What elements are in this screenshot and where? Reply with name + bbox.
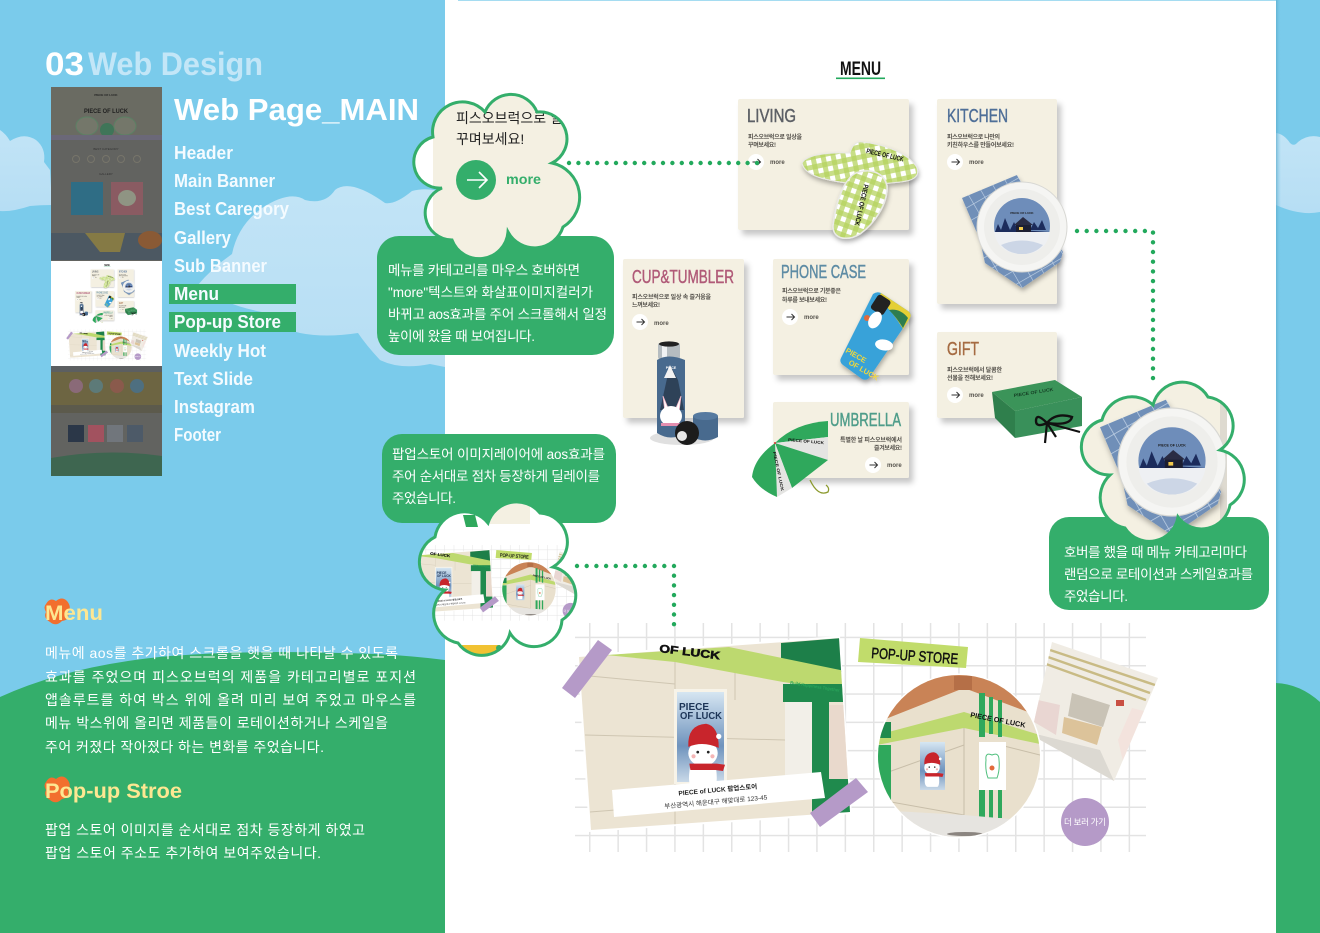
thumbnail of web page: PIECE OF LUCK — [84, 109, 129, 115]
text block: Pop-up description: 팝업 스토어 이미지를 순서대로 점차 등장하게 하였고 — [45, 822, 365, 838]
card: phone case: 하루를 보내보세요! — [782, 296, 827, 304]
callout: hover rotation: 랜덤으로 로테이션과 스케일효과를 — [1064, 567, 1253, 582]
menu heading: MENU — [840, 59, 881, 80]
thumbnail of web page: GALLERY — [99, 172, 113, 176]
text block: Menu description: 메뉴 박스위에 올리면 제품들이 로테이션하거나 스케일을 — [45, 715, 388, 731]
card: umbrella: UMBRELLA — [830, 410, 901, 430]
navigation list: Best Caregory — [174, 199, 289, 219]
photo: storefront — [570, 630, 860, 840]
product: phone case: PIECE — [844, 346, 868, 365]
white page panel — [445, 0, 1276, 933]
product: umbrella: PIECE OF LUCK — [788, 437, 824, 445]
dotted connector: menu hover — [569, 161, 760, 165]
navigation list: Instagram — [174, 397, 255, 417]
navigation list: Menu — [174, 284, 219, 304]
photo: shop interior — [1025, 640, 1165, 785]
product: gift box: PIECE OF LUCK — [1013, 387, 1055, 398]
card: cup and tumbler: CUP&TUMBLER — [632, 267, 734, 287]
green hill: left — [0, 652, 445, 933]
card: living: 피스오브럭으로 일상을 — [748, 133, 802, 141]
more button — [1061, 798, 1109, 846]
product: slippers — [802, 142, 918, 238]
callout: more hover: "more"텍스트와 화살표이미지컬러가 — [388, 285, 593, 300]
product: gift box — [992, 380, 1082, 443]
callout: hover rotation — [1049, 517, 1269, 610]
highlight: menu — [169, 284, 296, 304]
photo: round storefront — [875, 670, 1045, 840]
page title: Web Page_MAIN — [174, 92, 419, 127]
arrow button — [456, 160, 496, 200]
card: gift: 피스오브럭에서 달콤한 — [947, 366, 1002, 374]
card: kitchen: more — [969, 160, 984, 166]
product: plate and napkin: PIECE OF LUCK — [1010, 211, 1034, 215]
photo: storefront: OF LUCK — [659, 643, 721, 662]
product: phone case — [840, 292, 911, 383]
callout: pop-up delay: 팝업스토어 이미지레이어에 aos효과를 — [392, 447, 605, 462]
heading: Menu: Menu — [45, 602, 103, 625]
callout: more hover: 메뉴를 카테고리를 마우스 호버하면 — [388, 263, 580, 278]
card: kitchen — [937, 99, 1057, 304]
cloud: left small — [0, 130, 52, 211]
product: slippers: PIECE OF LUCK — [866, 148, 904, 163]
card: gift: more — [969, 393, 984, 399]
card: umbrella: 특별한 날 피스오브럭에서 — [840, 436, 902, 444]
card: living — [738, 99, 909, 230]
address card: PIECE of LUCK 팝업스토어 — [678, 782, 758, 797]
pop-up store label — [858, 638, 968, 668]
menu section — [623, 59, 1082, 497]
card: living: more — [770, 160, 785, 166]
navigation list: Sub Banner — [174, 256, 267, 276]
clover magnifier: more button: 꾸며보세요! — [456, 131, 524, 147]
card: phone case: 피스오브럭으로 기분좋은 — [782, 287, 841, 295]
text block: Menu description: 효과를 주었으며 피스오브럭의 제품을 카테고리별로 포지션 — [45, 669, 416, 685]
callout: more hover: 바뀌고 aos효과를 주어 스크롤해서 일정 — [388, 307, 607, 322]
card: umbrella — [773, 402, 909, 478]
text block: Pop-up description: 팝업 스토어 주소도 추가하여 보여주었습니다. — [45, 845, 321, 861]
product: umbrella — [752, 421, 829, 497]
callout: more hover: 높이에 왔을 때 보여집니다. — [388, 329, 535, 344]
thumbnail of web page: BEST CATEGORY — [93, 147, 119, 151]
navigation list: Footer — [174, 425, 221, 445]
callout: hover rotation: 주었습니다. — [1064, 589, 1128, 604]
navigation list: Weekly Hot — [174, 341, 266, 361]
photo: storefront: Build Happiness Together — [790, 680, 840, 693]
card: cup and tumbler: more — [654, 321, 669, 327]
product: umbrella: PIECE OF LUCK — [772, 451, 785, 491]
text block: Pop-up description — [45, 822, 365, 861]
navigation list — [169, 143, 296, 445]
callout: hover rotation: 호버를 했을 때 메뉴 카테고리마다 — [1064, 545, 1248, 560]
pop-up store section — [562, 623, 1165, 852]
photo: storefront: PIECE — [679, 702, 709, 713]
text block: Menu description: 메뉴에 aos를 추가하여 스크롤을 햇을 때 나타날 수 있도록 — [45, 645, 398, 661]
card: gift: 선물을 전해보세요! — [947, 374, 993, 382]
cloud: right — [1276, 133, 1320, 213]
navigation list: Pop-up Store — [174, 312, 281, 332]
product: slippers: PIECE OF LUCK — [853, 184, 869, 226]
section title: 03 — [45, 46, 84, 82]
callout: more hover — [377, 236, 614, 355]
section title: Web Design — [88, 46, 263, 82]
clover magnifier: more button — [412, 92, 582, 258]
card: phone case: PHONE CASE — [781, 262, 866, 282]
navigation list: Text Slide — [174, 369, 253, 389]
dotted connector: pop-up — [577, 566, 674, 627]
callout: pop-up delay: 주어 순서대로 점차 등장하게 딜레이를 — [392, 469, 600, 484]
clover magnifier: pop-up — [418, 503, 578, 657]
card: cup and tumbler: 피스오브럭으로 일상 속 즐거움을 — [632, 293, 711, 301]
product: tumbler: PIECE — [666, 366, 677, 370]
product: plate and napkin — [962, 175, 1067, 288]
callout: pop-up delay — [382, 434, 616, 523]
heading: Pop-up Stroe: Pop-up Stroe — [45, 780, 182, 803]
navigation list: Gallery — [174, 228, 231, 248]
thumbnail of web page: PIECE OF LUCK — [94, 93, 118, 97]
green hill: right — [1276, 683, 1320, 933]
pop-up store label: POP-UP STORE — [871, 645, 959, 668]
card: kitchen: 피스오브럭으로 나만의 — [947, 133, 1000, 141]
dotted connector: kitchen hover — [1077, 231, 1153, 386]
text block: Menu description: 주어 커졌다 작아졌다 하는 변화를 주었습니다. — [45, 739, 324, 755]
tape: top left — [562, 640, 612, 698]
card: living: LIVING — [747, 106, 796, 126]
card: gift — [937, 332, 1057, 418]
photo: round storefront: PIECE OF LUCK — [970, 710, 1027, 730]
more button: 더 보러 가기 — [1064, 817, 1106, 827]
navigation list: Header — [174, 143, 233, 163]
card: gift: GIFT — [947, 339, 979, 359]
card: kitchen: 키친하우스를 만들어보세요! — [947, 141, 1014, 149]
clover magnifier: more button: 피스오브럭으로 일상을 — [456, 110, 589, 126]
photo: storefront: OF LUCK — [680, 711, 723, 722]
address card — [612, 772, 825, 817]
callout: pop-up delay: 주었습니다. — [392, 491, 456, 506]
card: umbrella: more — [887, 463, 902, 469]
card: cup and tumbler: 느껴보세요! — [632, 301, 660, 309]
card: phone case — [773, 259, 909, 375]
navigation list: Main Banner — [174, 171, 275, 191]
product: tumbler — [650, 341, 718, 445]
grid background — [575, 623, 1146, 852]
product: phone case: OF LUCK — [847, 358, 881, 383]
card: living: 꾸며보세요! — [748, 141, 776, 149]
card: cup and tumbler — [623, 259, 744, 418]
card: kitchen: KITCHEN — [947, 106, 1008, 126]
clover magnifier: plate — [1080, 380, 1246, 540]
thumbnail of web page — [51, 87, 162, 476]
card: phone case: more — [804, 315, 819, 321]
text block: Menu description — [45, 645, 416, 755]
card: umbrella: 즐겨보세요! — [874, 444, 902, 452]
cloud: big centre — [197, 186, 450, 368]
text block: Menu description: 앱솔루트를 하여 박스 위에 올려 미리 보여 주었고 마우스를 — [45, 692, 416, 708]
address card: 부산광역시 해운대구 해맞대로 123-45 — [664, 792, 768, 810]
clover magnifier: more button: more — [506, 171, 541, 187]
tape: bottom right — [810, 778, 868, 827]
